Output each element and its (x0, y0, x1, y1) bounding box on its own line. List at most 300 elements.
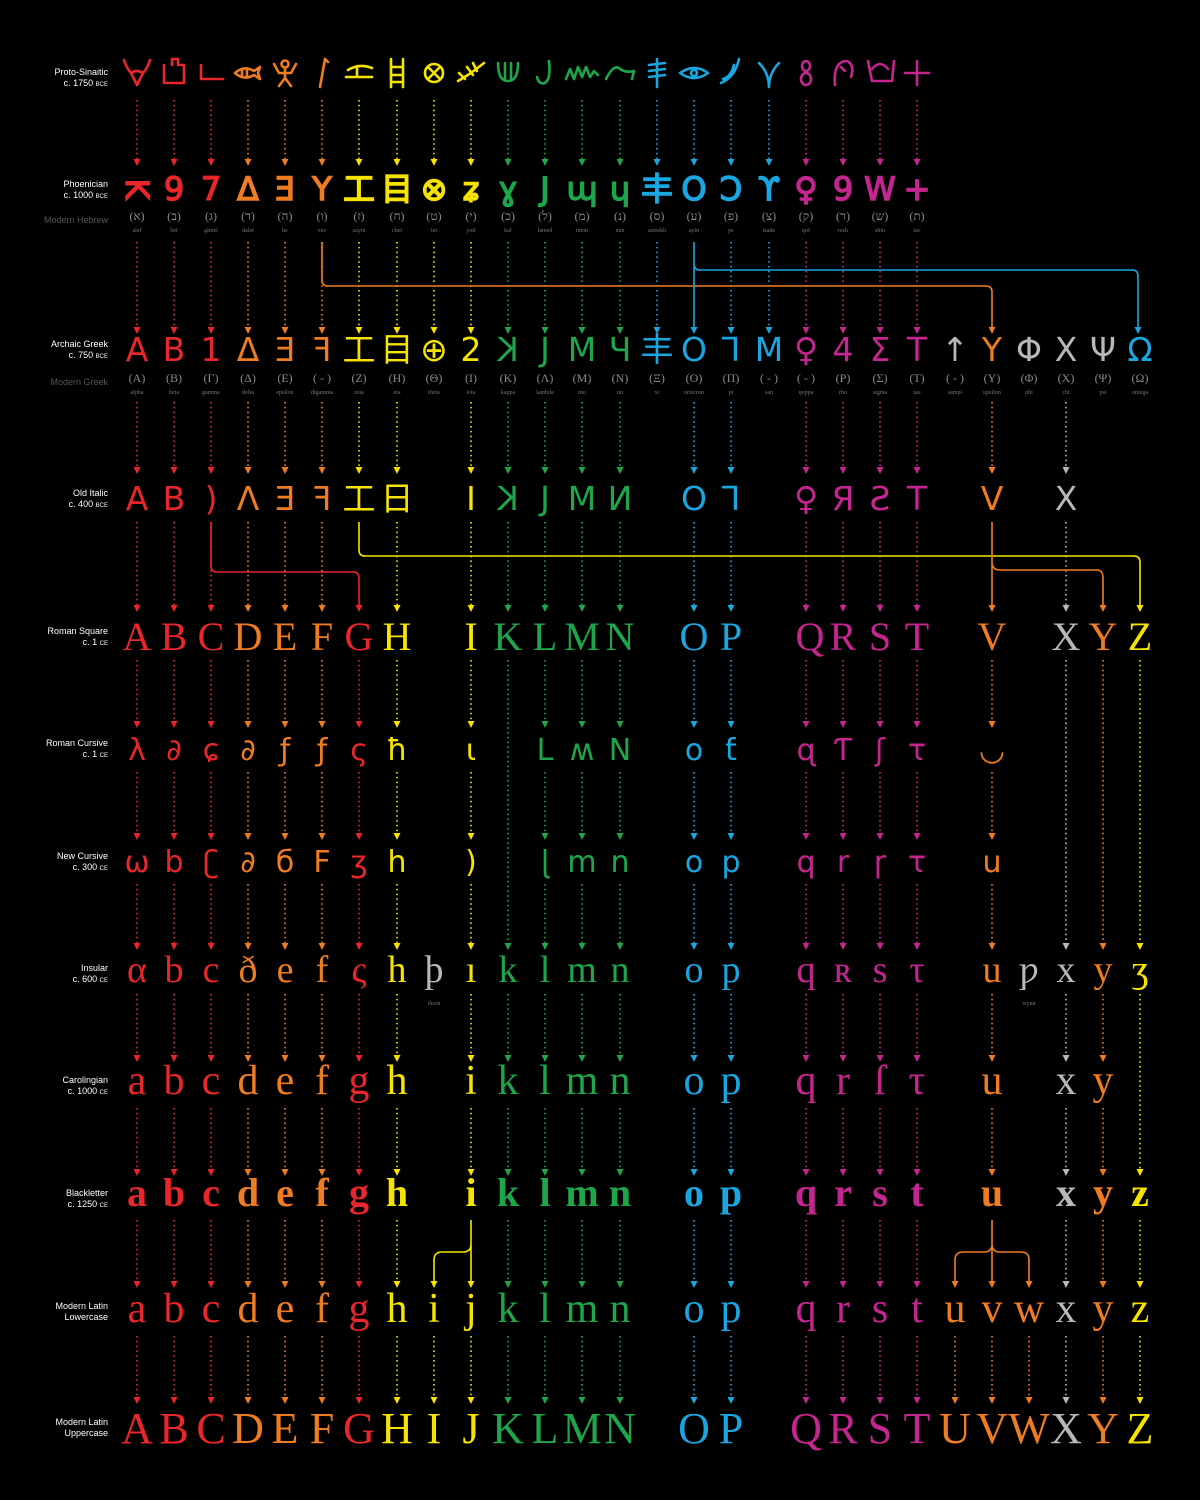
row: Archaic Greek: Δ (237, 330, 260, 369)
row: Archaic Greek: Ω (1127, 330, 1153, 369)
row: Archaic Greek (126, 330, 1153, 369)
Hebrew equivalents: alef (132, 227, 142, 234)
row: Modern Latin Uppercase: W (1008, 1404, 1050, 1453)
row labels: Old Italic (73, 488, 108, 498)
Hebrew equivalents: (ז) (353, 209, 365, 223)
row: New Cursive (124, 845, 1002, 880)
Modern Greek equivalents: (P) (836, 371, 850, 385)
row: Roman Square: V (978, 614, 1007, 659)
Modern Greek equivalents: (Δ) (240, 371, 256, 385)
row: Modern Latin Lowercase: n (610, 1286, 630, 1332)
row: Old Italic: K (496, 479, 519, 518)
row: Blackletter: a (127, 1170, 147, 1215)
Modern Greek equivalents: theta (428, 390, 440, 396)
row: Old Italic: B (163, 479, 185, 518)
row: Modern Latin Lowercase: e (276, 1286, 294, 1332)
row: Roman Cursive (128, 733, 1005, 768)
row: Phoenician: 7 (201, 170, 221, 208)
Modern Greek equivalents: alpha (130, 390, 144, 396)
row: Modern Latin Uppercase: X (1050, 1404, 1082, 1453)
row: Modern Latin Uppercase (121, 1404, 1153, 1453)
row labels: c. 300 CE (73, 862, 108, 872)
row: Insular (127, 949, 1148, 991)
Hebrew equivalents: (א) (129, 209, 145, 223)
row: Modern Latin Uppercase: Y (1087, 1404, 1119, 1453)
row: Roman Cursive: ƒ (278, 733, 292, 768)
row labels: c. 1250 CE (68, 1199, 108, 1209)
Modern Greek equivalents: (Ψ) (1095, 371, 1111, 385)
row: Roman Square: C (198, 614, 224, 659)
row: Old Italic: J (538, 479, 550, 518)
row: Roman Square: X (1052, 614, 1081, 659)
row: Roman Square: O (680, 614, 708, 659)
row labels: Modern Latin (55, 1301, 108, 1311)
row: Modern Latin Uppercase: B (159, 1404, 189, 1453)
connectors (211, 242, 1144, 1288)
row: Roman Cursive: N (609, 733, 631, 768)
Modern Greek equivalents: (Γ) (204, 371, 218, 385)
row: Insular: u (982, 949, 1002, 991)
row labels: Blackletter (66, 1188, 108, 1198)
Hebrew equivalents: (ס) (650, 209, 664, 223)
row: Modern Latin Uppercase: M (562, 1404, 602, 1453)
Modern Greek equivalents: (H) (389, 371, 405, 385)
Modern Greek equivalents: mu (578, 390, 586, 396)
row: Archaic Greek: 工 (342, 330, 376, 369)
row: Roman Square: H (383, 614, 411, 659)
row: Modern Latin Uppercase: G (343, 1404, 375, 1453)
row: Roman Cursive: ∂ (240, 733, 256, 768)
row: Blackletter: o (684, 1170, 704, 1215)
row: Archaic Greek: Γ (721, 330, 740, 369)
Modern Greek equivalents: (E) (277, 371, 293, 385)
row: Roman Cursive: Ƭ (834, 733, 853, 768)
row: Modern Latin Lowercase: i (428, 1286, 440, 1332)
Hebrew equivalents: tav (913, 228, 921, 234)
row: Archaic Greek: Ψ (1090, 330, 1116, 369)
row: Archaic Greek: Ǝ (275, 330, 295, 369)
Modern Greek equivalents: ( - ) (760, 371, 778, 385)
row: Modern Latin Uppercase: N (604, 1404, 636, 1453)
row: Insular: l (540, 949, 550, 991)
row: Old Italic: 工 (342, 479, 376, 518)
row: Roman Square: E (273, 614, 297, 659)
Modern Greek equivalents: sampi (948, 390, 962, 396)
row: Modern Latin Lowercase: a (128, 1286, 147, 1332)
Modern Greek equivalents: (Π) (723, 371, 739, 385)
row: Carolingian: y (1092, 1058, 1114, 1104)
row: Roman Square: L (533, 614, 557, 659)
Modern Greek equivalents: (Ξ) (649, 371, 665, 385)
row labels: Roman Square (47, 626, 108, 636)
Hebrew equivalents: chet (392, 228, 402, 234)
row: Modern Latin Lowercase: v (982, 1286, 1002, 1332)
Modern Greek equivalents: lambda (536, 390, 554, 396)
Modern Greek equivalents: (M) (573, 371, 591, 385)
row: Carolingian: τ (909, 1058, 925, 1104)
Hebrew equivalents: resh (838, 228, 848, 234)
row: Insular: ð (238, 949, 258, 991)
row: New Cursive: ʒ (350, 845, 368, 880)
row: Phoenician: 9 (164, 170, 184, 208)
row: Modern Latin Lowercase: k (498, 1286, 518, 1332)
Modern Greek equivalents: digamma (311, 390, 334, 396)
row: Carolingian: l (539, 1058, 551, 1104)
connector: C to G (211, 522, 362, 612)
row: Roman Square: T (905, 614, 929, 659)
row: Phoenician: ♀ (794, 170, 818, 208)
row: Roman Square: S (869, 614, 891, 659)
row: Roman Square (123, 614, 1152, 659)
row: New Cursive: m (567, 845, 597, 880)
row: Insular: b (164, 949, 184, 991)
row: Modern Latin Lowercase: b (164, 1286, 184, 1332)
row: Carolingian: n (610, 1058, 630, 1104)
row: Blackletter: l (539, 1170, 551, 1215)
Hebrew equivalents: (י) (465, 209, 477, 223)
Modern Greek equivalents: (N) (612, 371, 628, 385)
row: Roman Cursive: ι (466, 733, 476, 768)
row: Modern Latin Uppercase: O (678, 1404, 710, 1453)
row: Blackletter: e (276, 1170, 294, 1215)
row: Modern Latin Lowercase: h (386, 1286, 408, 1332)
row: Modern Latin Lowercase: w (1014, 1286, 1045, 1332)
row: Modern Latin Uppercase: L (532, 1404, 558, 1453)
Modern Greek equivalents: ( - ) (797, 371, 815, 385)
Hebrew equivalents: dalet (242, 228, 254, 234)
row: Roman Cursive: ◡ (979, 733, 1005, 768)
row: Insular: ʀ (834, 949, 853, 991)
Hebrew equivalents: zayin (352, 228, 366, 234)
Modern Greek equivalents: rho (839, 390, 847, 396)
Modern Greek equivalents: pi (729, 390, 734, 396)
row: Carolingian: u (982, 1058, 1002, 1104)
row: Carolingian: x (1056, 1058, 1076, 1104)
row: Modern Latin Lowercase: y (1092, 1286, 1114, 1332)
row: Modern Latin Uppercase: A (121, 1404, 153, 1453)
row: Blackletter: n (609, 1170, 631, 1215)
row: Insular: y (1094, 949, 1112, 991)
row: Roman Cursive: ƭ (725, 733, 737, 768)
Modern Greek equivalents: (X) (1058, 371, 1074, 385)
row: Archaic Greek: ♀ (794, 330, 818, 369)
Hebrew equivalents: ayin (689, 228, 699, 234)
Hebrew equivalents: lamed (538, 228, 552, 234)
row: Phoenician (118, 170, 930, 208)
row: Carolingian: g (348, 1058, 370, 1104)
row: Archaic Greek: B (163, 330, 185, 369)
row labels (44, 67, 108, 1438)
row: Old Italic: ♀ (794, 479, 818, 518)
Modern Greek equivalents: xi (655, 390, 660, 396)
Hebrew equivalents: (נ) (614, 209, 626, 223)
connector: V to V and Y (988, 522, 1106, 612)
row: Blackletter: p (720, 1170, 742, 1215)
row: Phoenician: J (538, 170, 550, 208)
Hebrew equivalents: bet (170, 228, 178, 234)
Modern Greek equivalents: nu (617, 390, 623, 396)
row: Old Italic: Ƨ (870, 479, 890, 518)
Modern Greek equivalents: (I) (465, 371, 477, 385)
Hebrew equivalents: (צ) (762, 209, 776, 223)
Hebrew equivalents: tsade (763, 228, 776, 234)
Modern Greek equivalents: (O) (686, 371, 702, 385)
row: Carolingian: a (128, 1058, 147, 1104)
row: Modern Latin Uppercase: I (427, 1404, 441, 1453)
row: New Cursive: τ (908, 845, 926, 880)
row: Insular: s (873, 949, 887, 991)
row: Phoenician: ⊗ (421, 170, 447, 208)
row: Archaic Greek: Ч (609, 330, 631, 369)
row: Modern Latin Lowercase: q (796, 1286, 816, 1332)
row: New Cursive: ∂ (240, 845, 256, 880)
insular letter names: wynn (1022, 1001, 1036, 1007)
row: Insular: þ (424, 949, 444, 991)
Modern Greek equivalents: chi (1062, 390, 1070, 396)
row labels: c. 1750 BCE (64, 78, 108, 88)
row: Modern Latin Lowercase: z (1131, 1286, 1149, 1332)
Modern Greek equivalents: upsilon (983, 390, 1001, 396)
Modern Greek equivalents: (B) (166, 371, 182, 385)
Hebrew equivalents: nun (616, 228, 624, 234)
row: Phoenician: Y (311, 170, 332, 208)
row: Roman Cursive: ɋ (796, 733, 816, 768)
Hebrew equivalents: (ו) (316, 209, 328, 223)
row: Blackletter: h (386, 1170, 408, 1215)
row: Insular: c (203, 949, 219, 991)
row: Roman Cursive: o (685, 733, 703, 768)
row: Archaic Greek: A (126, 330, 149, 369)
row: Old Italic: X (1055, 479, 1077, 518)
row: New Cursive: Ϝ (313, 845, 331, 880)
insular letter names (428, 1001, 1036, 1007)
row: Archaic Greek: 丰 (640, 330, 674, 369)
row: Insular: q (796, 949, 816, 991)
row: Archaic Greek: T (906, 330, 928, 369)
Modern Greek equivalents: beta (169, 390, 179, 396)
row: Roman Cursive: ƒ (315, 733, 329, 768)
row labels: Lowercase (64, 1312, 108, 1322)
row: Blackletter: d (237, 1170, 259, 1215)
row: Carolingian: f (315, 1058, 329, 1104)
row: Insular: n (610, 949, 630, 991)
row: Phoenician: Ↄ (720, 170, 742, 208)
row: Insular: x (1056, 949, 1076, 991)
Modern Greek equivalents: phi (1025, 390, 1033, 396)
Hebrew equivalents: samekh (648, 228, 666, 234)
row: Blackletter (127, 1170, 1149, 1215)
Modern Greek equivalents: (Φ) (1021, 371, 1037, 385)
row: Modern Latin Uppercase: R (828, 1404, 858, 1453)
row: Insular: τ (909, 949, 925, 991)
Hebrew equivalents: vav (318, 228, 326, 234)
row: Old Italic: Λ (237, 479, 260, 518)
dotted arrows (134, 100, 1144, 1404)
row: Insular: ı (466, 949, 476, 991)
row: Roman Square: Y (1089, 614, 1117, 659)
row: Old Italic: Ǝ (275, 479, 295, 518)
row: Modern Latin Lowercase: j (463, 1286, 477, 1332)
row labels: c. 1 CE (83, 637, 108, 647)
Hebrew equivalents: (ג) (205, 209, 217, 223)
row labels: c. 1000 BCE (64, 190, 108, 200)
row labels: c. 750 BCE (69, 350, 108, 360)
Hebrew equivalents: (ש) (872, 209, 888, 223)
row: Old Italic: F (313, 479, 331, 518)
connector: vav to upsilon (322, 242, 996, 334)
Hebrew equivalents: tet (431, 228, 437, 234)
Modern Greek equivalents: (T) (909, 371, 925, 385)
Modern Greek equivalents: (K) (500, 371, 516, 385)
Modern Greek equivalents: (Λ) (537, 371, 553, 385)
row labels: Carolingian (62, 1075, 108, 1085)
row: Insular: m (567, 949, 597, 991)
row: New Cursive: б (276, 845, 294, 880)
row: Archaic Greek: M (568, 330, 596, 369)
row: Modern Latin Uppercase: S (868, 1404, 892, 1453)
row: Phoenician: ɣ (498, 170, 518, 208)
row: Archaic Greek: ⊕ (420, 330, 448, 369)
row: Old Italic: И (608, 479, 632, 518)
row: Blackletter: k (497, 1170, 520, 1215)
row: New Cursive: q (796, 845, 816, 880)
row: Proto-Sinaitic pictographs (124, 59, 929, 87)
row: New Cursive: ) (465, 845, 477, 880)
row labels: Roman Cursive (46, 738, 108, 748)
Hebrew equivalents: mem (576, 228, 588, 234)
row: Phoenician: 工 (343, 170, 375, 208)
row: Carolingian: o (684, 1058, 704, 1104)
row: Modern Latin Uppercase: T (904, 1404, 931, 1453)
row: New Cursive: n (610, 845, 630, 880)
Modern Greek equivalents: iota (466, 390, 476, 396)
row: Roman Cursive: λ (128, 733, 146, 768)
Modern Greek equivalents: qoppa (799, 390, 814, 396)
row: Modern Latin Uppercase: Q (790, 1404, 822, 1453)
row: Roman Square: Z (1128, 614, 1152, 659)
row labels: c. 1000 CE (68, 1086, 108, 1096)
row labels: Modern Hebrew (44, 215, 108, 225)
row: Carolingian: q (796, 1058, 816, 1104)
row: Insular: ς (351, 949, 367, 991)
row: Insular: ʒ (1132, 949, 1148, 991)
Modern Greek equivalents: zeta (354, 390, 364, 396)
row: Old Italic: ) (205, 479, 217, 518)
row labels: Modern Latin (55, 1417, 108, 1427)
row labels: Phoenician (63, 179, 108, 189)
row: Blackletter: y (1093, 1170, 1113, 1215)
row: Modern Latin Uppercase: D (232, 1404, 264, 1453)
row: Archaic Greek: K (496, 330, 519, 369)
row: Modern Latin Lowercase: d (238, 1286, 258, 1332)
row: New Cursive: h (387, 845, 407, 880)
row: Modern Latin Lowercase: x (1056, 1286, 1076, 1332)
row: Insular: e (277, 949, 293, 991)
row: Carolingian: k (498, 1058, 518, 1104)
row: Roman Square: P (720, 614, 742, 659)
Modern Greek equivalents: ( - ) (946, 371, 964, 385)
row: Modern Latin Uppercase: K (492, 1404, 524, 1453)
row: Carolingian: m (566, 1058, 599, 1104)
Hebrew equivalents: (ת) (909, 209, 925, 223)
row: Phoenician: ϒ (758, 170, 780, 208)
row: Insular: h (388, 949, 406, 991)
row: Carolingian: b (164, 1058, 184, 1104)
row: Modern Latin Lowercase: f (315, 1286, 329, 1332)
Hebrew equivalents (129, 209, 925, 234)
row: Roman Cursive: ʍ (570, 733, 594, 768)
Modern Greek equivalents: sigma (873, 390, 887, 396)
row: Modern Latin Lowercase: l (539, 1286, 551, 1332)
row: Old Italic: I (466, 479, 476, 518)
row: Modern Latin Uppercase: V (976, 1404, 1008, 1453)
row: Carolingian: ſ (874, 1058, 888, 1104)
row: New Cursive: r (837, 845, 850, 880)
row: New Cursive: ω (124, 845, 150, 880)
row: Modern Latin Uppercase: P (719, 1404, 743, 1453)
row: Modern Latin Uppercase: E (272, 1404, 298, 1453)
Hebrew equivalents: yod (466, 228, 476, 234)
row: Archaic Greek: 4 (832, 330, 854, 369)
row: Blackletter: g (349, 1170, 369, 1215)
Modern Greek equivalents: omega (1132, 390, 1148, 396)
Modern Greek equivalents: (Σ) (873, 371, 887, 385)
row: Archaic Greek: O (681, 330, 707, 369)
row: Roman Square: Q (796, 614, 825, 659)
row: New Cursive: ɼ (874, 845, 887, 880)
row: New Cursive: ʗ (203, 845, 219, 880)
row: Phoenician: K (118, 179, 156, 201)
row labels: New Cursive (57, 851, 108, 861)
row: Blackletter: r (834, 1170, 852, 1215)
connector: u to u v w (952, 1220, 1032, 1288)
row: Archaic Greek: J (538, 330, 550, 369)
row: Modern Latin Lowercase: p (720, 1286, 742, 1332)
row: Roman Square: A (123, 614, 152, 659)
row: Phoenician: Δ (237, 170, 259, 208)
row: Roman Square: G (345, 614, 373, 659)
row: Blackletter: q (795, 1170, 817, 1215)
Modern Greek equivalents: eta (394, 390, 401, 396)
row: Modern Latin Lowercase: s (872, 1286, 888, 1332)
row: Roman Square: I (464, 614, 478, 659)
row: Blackletter: i (465, 1170, 477, 1215)
row: Blackletter: c (202, 1170, 220, 1215)
row: Roman Square: F (311, 614, 333, 659)
Hebrew equivalents: (ה) (278, 209, 292, 223)
Hebrew equivalents: (ל) (538, 209, 552, 223)
row: Roman Square: B (161, 614, 187, 659)
row: Old Italic: 日 (380, 479, 414, 518)
row: Blackletter: s (872, 1170, 888, 1215)
row: Insular: k (498, 949, 518, 991)
row: New Cursive: u (982, 845, 1002, 880)
Modern Greek equivalents (129, 371, 1148, 396)
row: Roman Square: N (606, 614, 634, 659)
Modern Greek equivalents: delta (242, 390, 254, 396)
Modern Greek equivalents: (Θ) (426, 371, 442, 385)
row: Modern Latin Uppercase: Z (1127, 1404, 1153, 1453)
connector: i to i and j (430, 1220, 474, 1288)
row: Archaic Greek: 1 (200, 330, 222, 369)
row: Modern Latin Lowercase: r (836, 1286, 850, 1332)
row: Archaic Greek: 2 (460, 330, 482, 369)
row: Blackletter: x (1056, 1170, 1076, 1215)
row: Old Italic: O (681, 479, 707, 518)
row: Archaic Greek: F (313, 330, 331, 369)
row: Modern Latin Lowercase: u (944, 1286, 966, 1332)
row: Archaic Greek: M (755, 330, 783, 369)
